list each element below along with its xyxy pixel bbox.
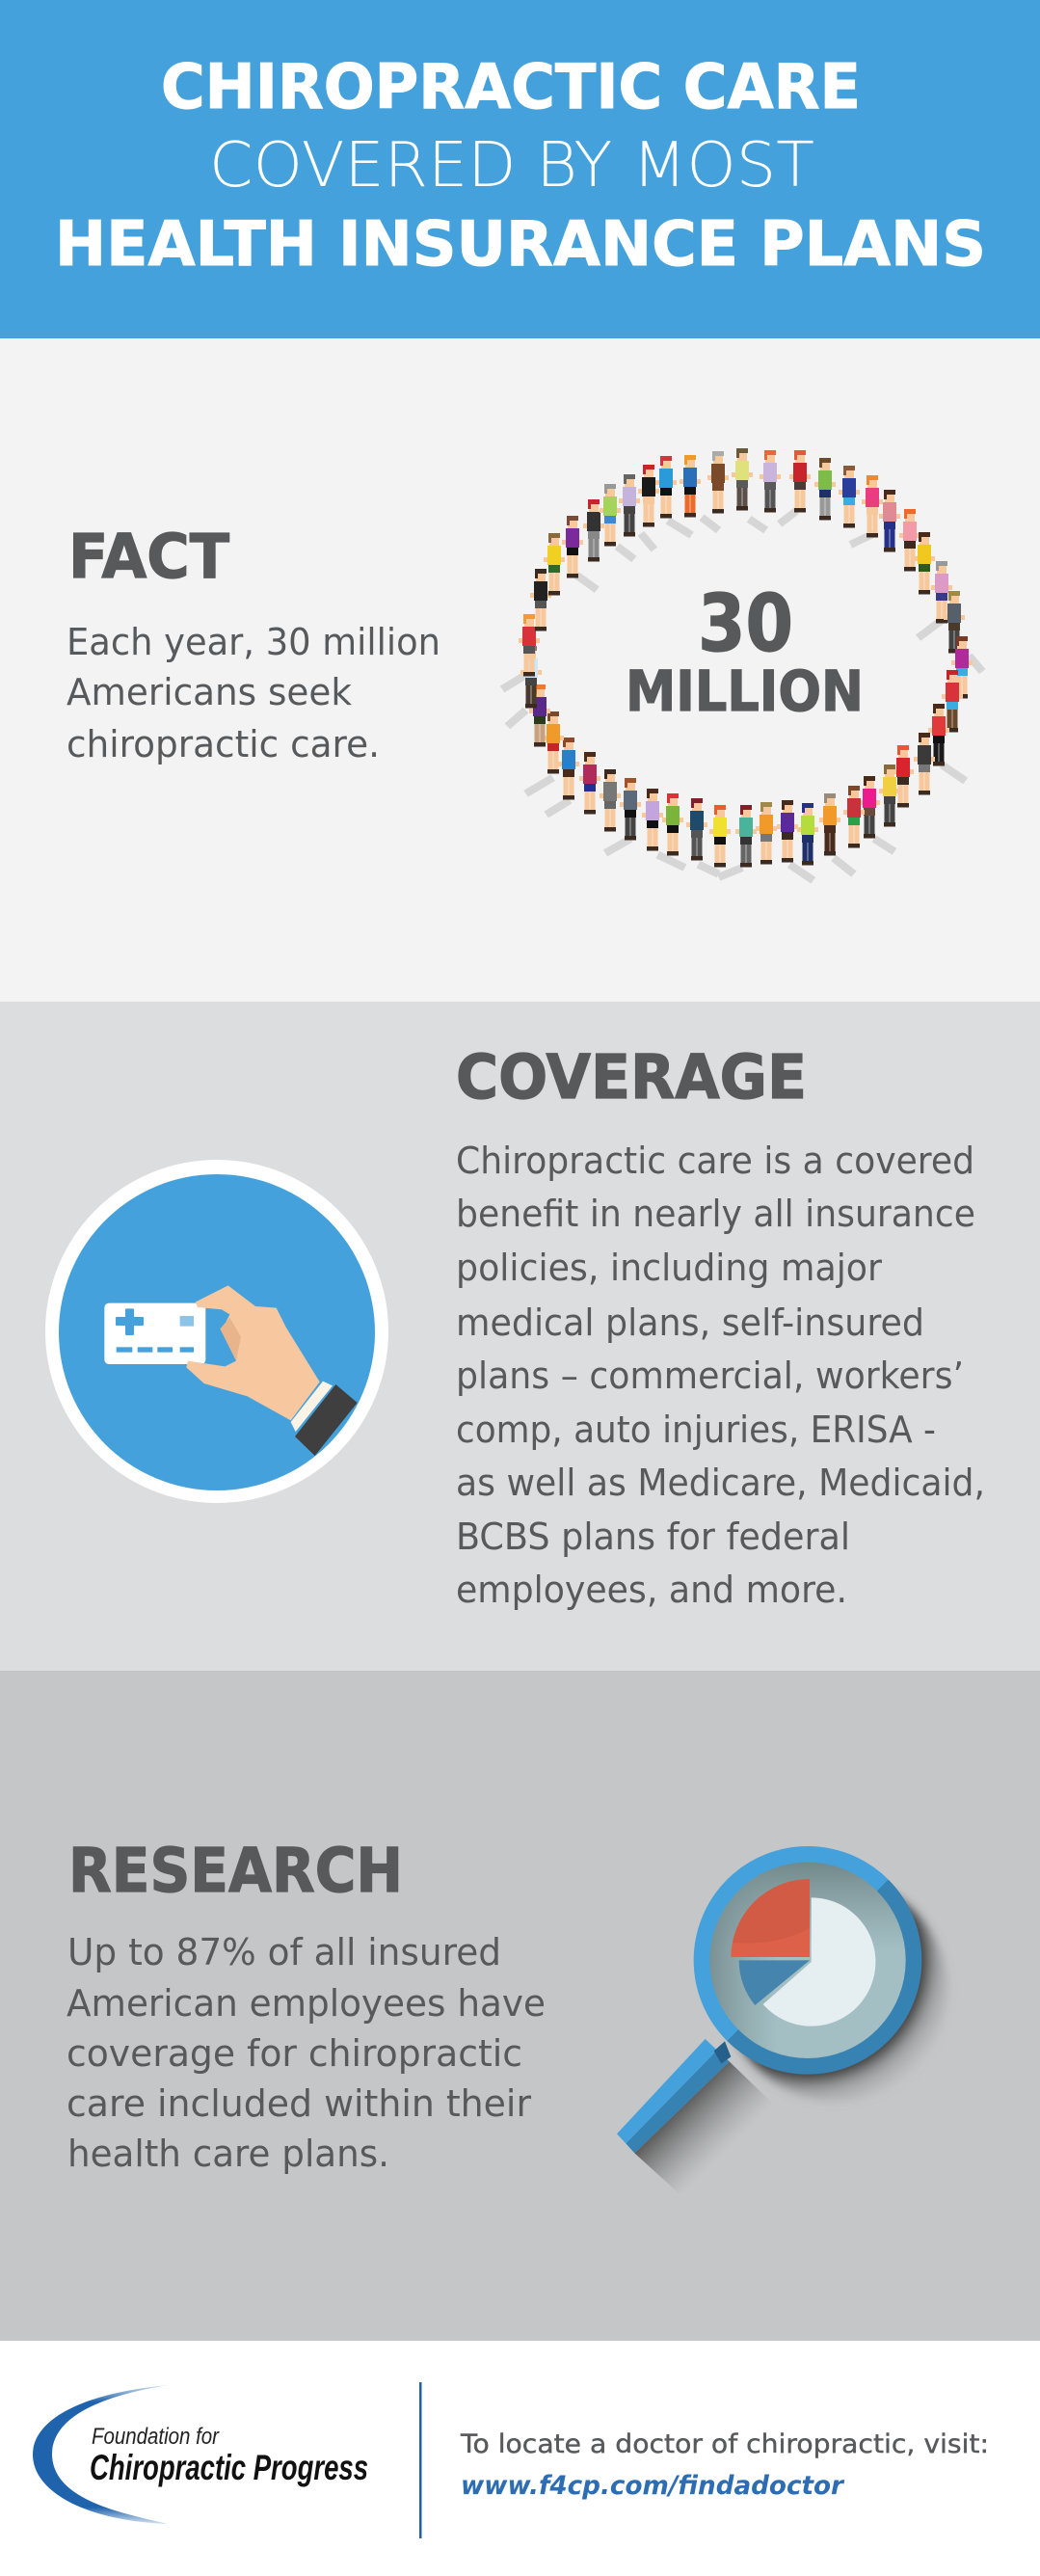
panel: research <box>0 1671 1040 2341</box>
logo text: foundation for: Foundation for <box>92 2424 220 2450</box>
coverage text: policies, including major <box>456 1247 882 1289</box>
ring <box>702 1854 914 2066</box>
coverage text: comp, auto injuries, ERISA - <box>456 1409 936 1451</box>
research text: Up to 87% of all insured <box>67 1931 501 1973</box>
jacket sleeve <box>295 1384 358 1456</box>
coverage heading: COVERAGE <box>456 1042 807 1113</box>
fact text <box>67 621 440 765</box>
title line 1: CHIROPRACTIC CARE <box>161 52 861 123</box>
research text <box>67 1931 546 2175</box>
coverage text: plans – commercial, workers’ <box>456 1355 964 1397</box>
panel: coverage <box>0 1002 1040 1671</box>
locate doctor text: To locate a doctor of chiropractic, visit: <box>460 2429 989 2459</box>
coverage text: Chiropractic care is a covered <box>456 1140 974 1182</box>
logo <box>33 2385 368 2524</box>
header banner <box>0 0 1040 338</box>
lens <box>708 1862 907 2059</box>
logo crescent <box>33 2385 169 2524</box>
title line 3: HEALTH INSURANCE PLANS <box>55 209 986 281</box>
shirt cuff <box>291 1382 333 1432</box>
research heading: RESEARCH <box>68 1836 403 1906</box>
hand <box>186 1285 320 1420</box>
coverage text <box>456 1140 985 1611</box>
coverage text: as well as Medicare, Medicaid, <box>456 1462 985 1504</box>
million label: MILLION <box>626 658 864 724</box>
coverage text: medical plans, self-insured <box>456 1301 924 1344</box>
footer <box>0 2341 1040 2576</box>
coverage text: benefit in nearly all insurance <box>456 1193 975 1235</box>
coverage text: employees, and more. <box>456 1569 847 1611</box>
icon: magnifying glass over pie chart <box>617 1854 947 2201</box>
30 number: 30 <box>698 578 793 670</box>
handle <box>617 2039 731 2153</box>
title line 2: COVERED BY MOST <box>209 130 814 201</box>
research text: coverage for chiropractic <box>67 2032 522 2075</box>
research text: American employees have <box>67 1982 546 2025</box>
research text: health care plans. <box>67 2133 389 2175</box>
icon: hand holding insurance card <box>45 1160 388 1503</box>
insurance card <box>104 1303 205 1364</box>
coverage text: BCBS plans for federal <box>456 1516 850 1558</box>
fact text: Each year, 30 million <box>67 621 440 663</box>
footer divider <box>419 2382 422 2538</box>
pie chart <box>731 1879 875 2026</box>
panel: fact <box>0 338 1040 1002</box>
fact text: Americans seek <box>67 671 352 713</box>
website url: www.f4cp.com/findadoctor <box>461 2471 845 2501</box>
circle of people <box>502 448 982 880</box>
logo text: chiropractic progress: Chiropractic Progress <box>90 2448 368 2487</box>
fact text: chiropractic care. <box>67 723 380 765</box>
fact heading: FACT <box>68 522 229 592</box>
research text: care included within their <box>67 2082 531 2125</box>
